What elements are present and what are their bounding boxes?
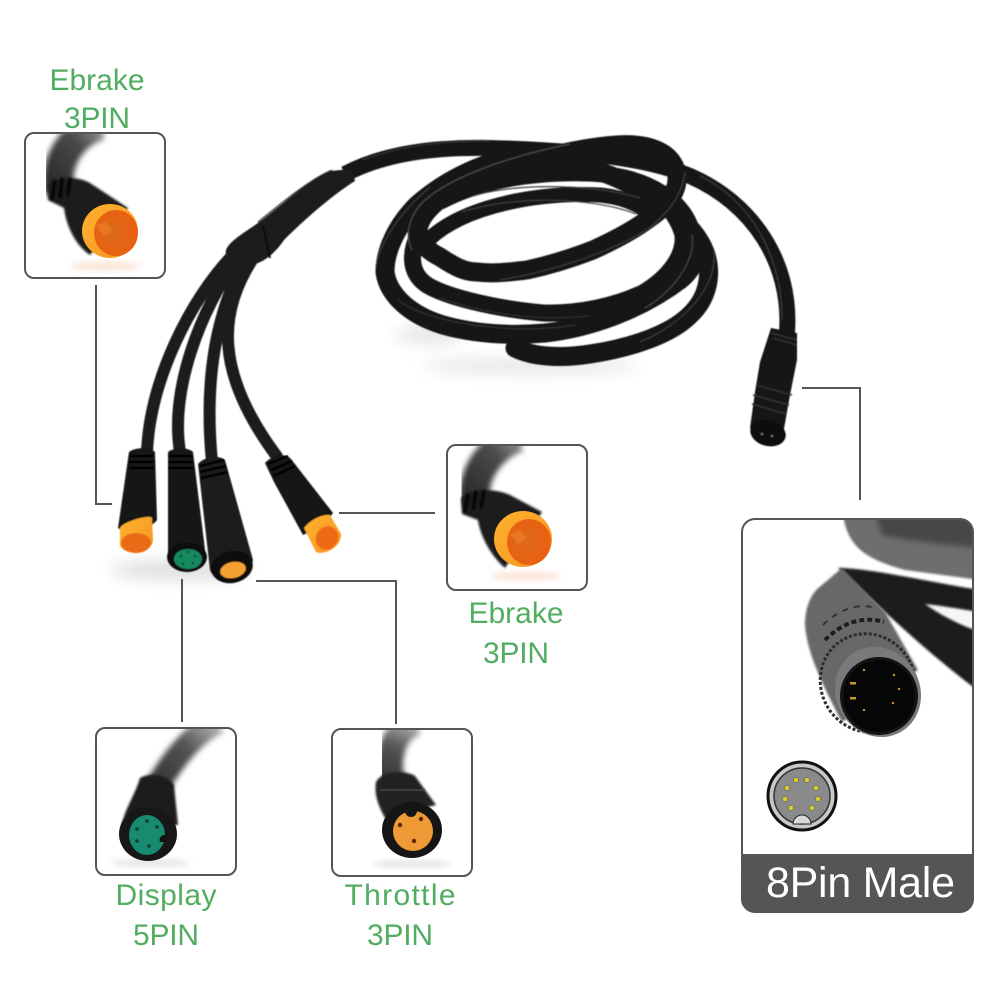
connector: ebrake right [265,455,343,554]
leader line: ebrake top [96,285,112,504]
leader line: display [181,579,183,722]
top coil ring [408,144,685,280]
label: 8 pin male: 8Pin Male [766,859,955,907]
label: throttle: Throttle [344,879,456,912]
label: ebrake top: Ebrake [50,64,144,97]
main cable to 8 pin connector [345,141,787,332]
connector: 8 pin male [747,328,797,450]
label: ebrake top: 3PIN [64,102,130,135]
label: display [116,879,216,952]
label bar [742,854,973,912]
label: throttle [344,879,456,952]
panel: 8 pin male inset [742,515,980,912]
label: display: Display [116,879,216,912]
leader line: throttle [256,581,396,724]
connector: display green [167,448,207,572]
label: display: 5PIN [133,919,199,952]
panel: ebrake top inset [25,125,165,278]
floor shadow [110,328,640,580]
label: ebrake right [468,597,564,670]
pinout icon [768,762,836,830]
inner coil strands [428,173,690,240]
leader line: ebrake right [339,512,435,514]
panel: throttle inset [332,722,472,876]
label: ebrake right: Ebrake [468,597,564,630]
connector: throttle orange [198,457,256,587]
second coil strand [412,183,692,318]
splitter moulding [226,169,355,265]
label: ebrake right: 3PIN [483,637,549,670]
connector: ebrake left [118,448,157,553]
panel: ebrake right inset [447,437,587,590]
panel: display inset [96,722,236,875]
cable assembly photo [110,141,797,587]
label: ebrake top [50,64,144,135]
label: throttle: 3PIN [367,919,433,952]
branch cables [147,256,278,462]
outer coil loop [376,157,714,356]
leader line: 8 pin [802,388,860,500]
